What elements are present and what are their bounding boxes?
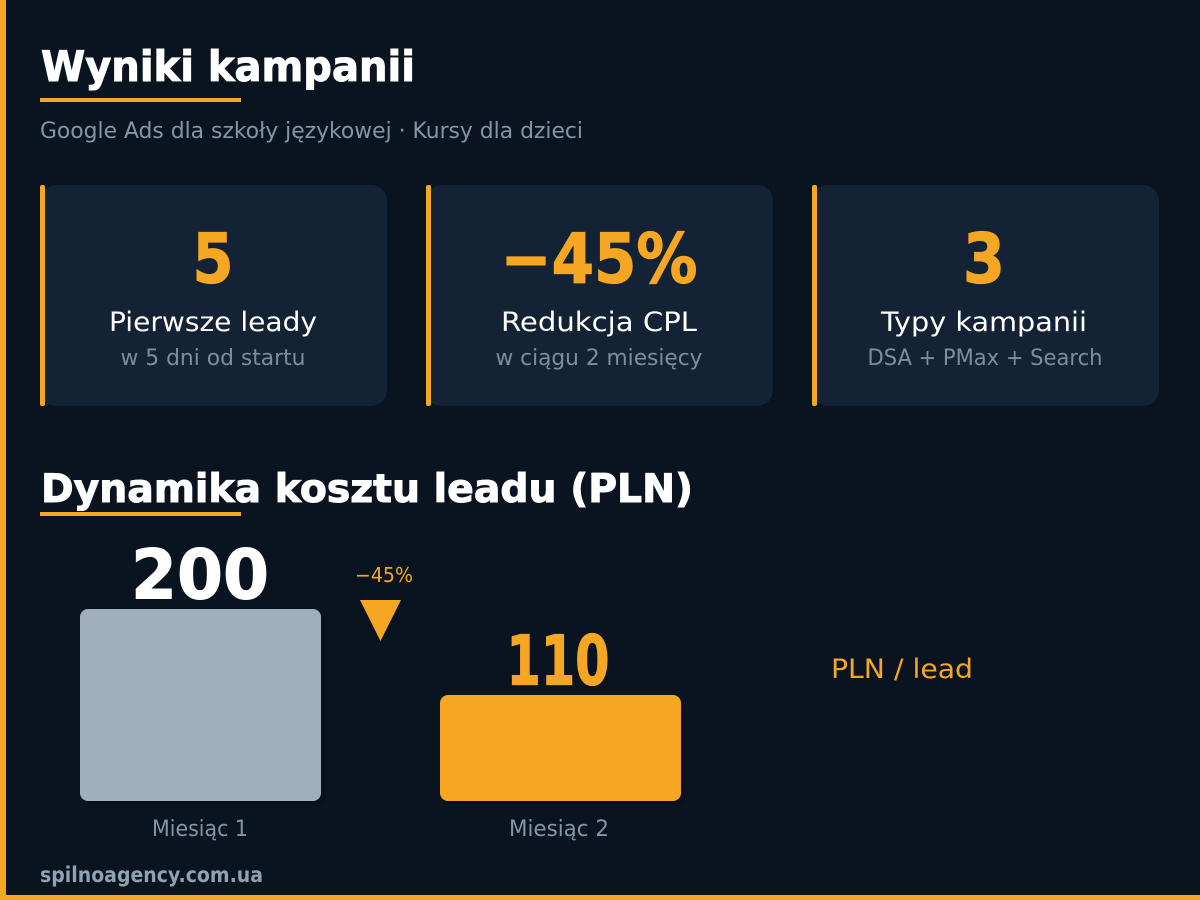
label: CPL reduction: Redukcja CPL bbox=[501, 307, 697, 338]
heading underline bbox=[40, 512, 241, 516]
label: month 1: Miesiąc 1 bbox=[152, 817, 248, 842]
bar chart bbox=[80, 536, 973, 842]
note: within 5 days: w 5 dni od startu bbox=[120, 346, 306, 371]
footer brand: spilnoagency.com.ua bbox=[40, 863, 263, 887]
subtitle: Google Ads dla szkoły językowej · Kursy dla dzieci bbox=[40, 119, 583, 144]
value: 200: 200 bbox=[131, 536, 269, 616]
label: month 2: Miesiąc 2 bbox=[509, 817, 609, 842]
title: Wyniki kampanii bbox=[41, 42, 415, 91]
title underline bbox=[40, 98, 241, 102]
section heading: Dynamika kosztu leadu (PLN) bbox=[41, 467, 693, 512]
icon: down arrow bbox=[360, 600, 401, 641]
value: 110: 110 bbox=[506, 622, 610, 702]
note: within 2 months: w ciągu 2 miesięcy bbox=[496, 346, 702, 371]
change indicator bbox=[355, 563, 413, 641]
note: campaign list: DSA + PMax + Search bbox=[868, 346, 1102, 371]
unit label: PLN / lead bbox=[831, 654, 973, 685]
bar: month 1 bbox=[80, 536, 321, 842]
metric: 5: 5 bbox=[192, 220, 234, 300]
label: first leads: Pierwsze leady bbox=[109, 307, 317, 338]
panel: campaign types bbox=[812, 185, 1159, 406]
bar: month 2 bbox=[440, 622, 681, 842]
metric: -45%: −45% bbox=[500, 220, 698, 300]
label: campaign types: Typy kampanii bbox=[880, 307, 1087, 338]
metric: 3: 3 bbox=[963, 220, 1005, 300]
panel: CPL reduction bbox=[426, 185, 773, 406]
panel: first leads bbox=[40, 185, 387, 406]
change label: −45% bbox=[355, 563, 413, 587]
